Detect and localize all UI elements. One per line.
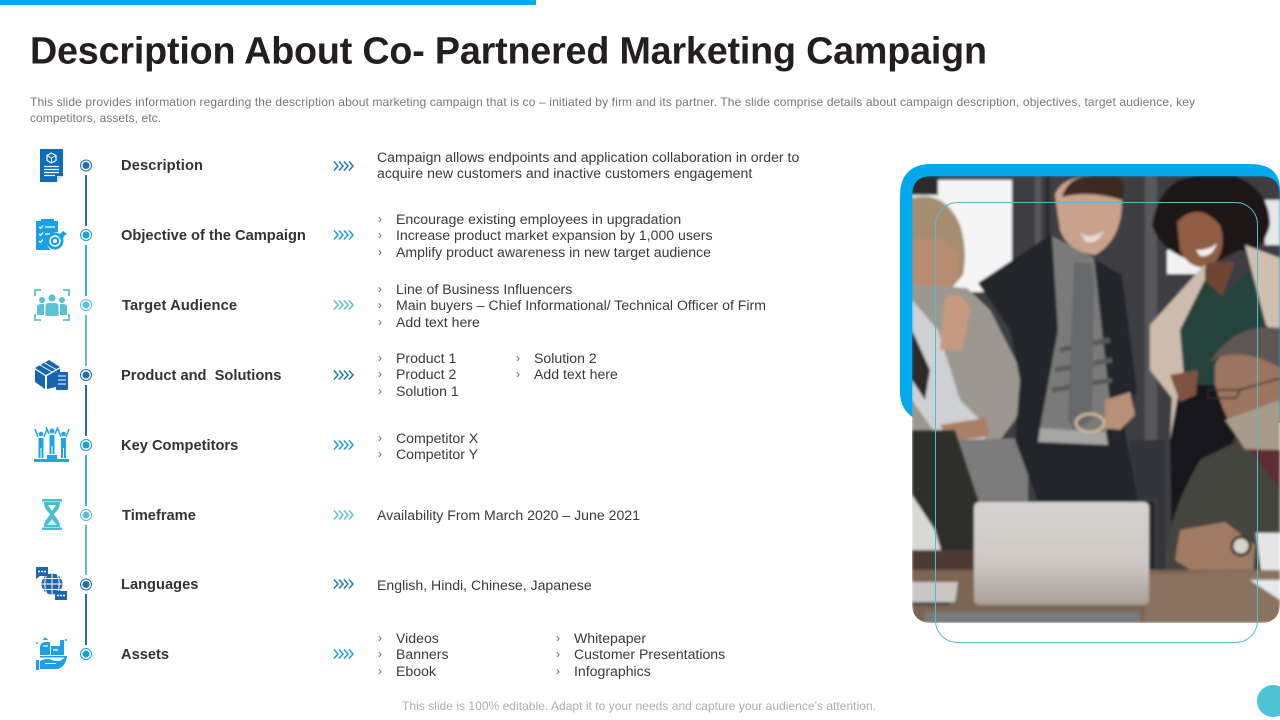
table bbox=[912, 570, 1280, 623]
arrow bbox=[334, 300, 353, 310]
row: languages bbox=[36, 567, 592, 600]
footer note: This slide is 100% editable. Adapt it to your needs and capture your audience's attention. bbox=[402, 699, 876, 713]
right woman bbox=[1152, 176, 1270, 260]
bullet list: › bbox=[378, 631, 382, 645]
photo outline frame bbox=[936, 202, 1258, 642]
bullet list bbox=[378, 630, 725, 679]
arrow bbox=[334, 370, 353, 380]
photo: business team around a laptop bbox=[912, 176, 1280, 623]
arrow bbox=[334, 440, 353, 450]
corner circle bbox=[1257, 685, 1280, 717]
bullet list: › bbox=[378, 431, 382, 445]
icon: clipboard with target bbox=[36, 219, 67, 250]
label: Target Audience bbox=[122, 298, 237, 314]
bullet list: › bbox=[556, 647, 560, 661]
bullet list: › bbox=[378, 228, 382, 242]
bullet list bbox=[378, 281, 766, 330]
row: target audience bbox=[35, 281, 766, 330]
bullet list: Videos bbox=[396, 630, 439, 646]
bullet list: › bbox=[556, 664, 560, 678]
bullet list: › bbox=[378, 664, 382, 678]
bullet list: Main buyers – Chief Informational/ Technical Officer of Firm bbox=[396, 297, 766, 313]
bullet list: Competitor Y bbox=[396, 446, 479, 462]
bullet list: › bbox=[556, 631, 560, 645]
row: timeframe bbox=[42, 499, 640, 530]
bullet list: Line of Business Influencers bbox=[396, 281, 572, 297]
icon: globe with chat bubbles bbox=[36, 567, 67, 600]
bullet list: Product 1 bbox=[396, 350, 456, 366]
row: key competitors bbox=[34, 427, 479, 462]
arrow bbox=[334, 230, 353, 240]
bullet list: › bbox=[516, 367, 520, 381]
bullet list: › bbox=[378, 298, 382, 312]
laptop bbox=[974, 502, 1149, 605]
icon: audience in brackets bbox=[35, 290, 69, 320]
icon: three raised-arm figures bbox=[34, 427, 69, 462]
bullet list: › bbox=[378, 212, 382, 226]
bullet list: › bbox=[378, 647, 382, 661]
label: Assets bbox=[121, 647, 169, 663]
bullet list: › bbox=[378, 447, 382, 461]
bullet list: Ebook bbox=[396, 663, 437, 679]
timeline bbox=[80, 160, 92, 660]
bullet list: Product 2 bbox=[396, 366, 456, 382]
title: Description About Co- Partnered Marketing Campaign bbox=[30, 30, 987, 72]
bullet list: Add text here bbox=[534, 366, 618, 382]
label: Key Competitors bbox=[121, 438, 238, 454]
label: Languages bbox=[121, 577, 198, 593]
intro text: competitors, assets, etc. bbox=[30, 111, 161, 125]
arrow bbox=[334, 650, 353, 658]
intro text: This slide provides information regarding the description about marketing campaign that is co – initiated by firm and its partner. The slide comprise details about campaign description, objectives, target audience, key bbox=[30, 95, 1195, 109]
bullet list: › bbox=[378, 315, 382, 329]
bullet list: Increase product market expansion by 1,000 users bbox=[396, 227, 713, 243]
bullet list: Competitor X bbox=[396, 430, 479, 446]
bullet list: Whitepaper bbox=[574, 630, 646, 646]
bullet list: Add text here bbox=[396, 314, 480, 330]
row: objective bbox=[36, 211, 713, 260]
centre man bbox=[978, 235, 1138, 502]
icon: hourglass bbox=[42, 499, 62, 530]
text: Availability From March 2020 – June 2021 bbox=[377, 507, 640, 523]
bullet list bbox=[378, 350, 618, 399]
top accent bar bbox=[0, 0, 536, 5]
bullet list: Infographics bbox=[574, 663, 651, 679]
text block: acquire new customers and inactive customers engagement bbox=[377, 165, 752, 181]
row: product and solutions bbox=[35, 350, 618, 399]
right man bbox=[1170, 443, 1254, 562]
bullet list: › bbox=[378, 367, 382, 381]
intro text bbox=[30, 95, 1195, 125]
label: Timeframe bbox=[122, 508, 196, 524]
bullet list: › bbox=[516, 351, 520, 365]
bullet list: › bbox=[378, 282, 382, 296]
left woman bbox=[912, 197, 965, 290]
text block: Campaign allows endpoints and application collaboration in order to bbox=[377, 149, 799, 165]
icon: hand holding assets bbox=[36, 637, 67, 670]
bullet list: Encourage existing employees in upgradation bbox=[396, 211, 681, 227]
bullet list: › bbox=[378, 245, 382, 259]
bullet list bbox=[378, 430, 479, 462]
bullet list: › bbox=[378, 351, 382, 365]
arrow bbox=[334, 162, 353, 170]
label: Product and Solutions bbox=[121, 368, 281, 384]
label: Description bbox=[121, 158, 203, 174]
bullet list: Solution 1 bbox=[396, 383, 459, 399]
icon: document with cube bbox=[40, 149, 63, 182]
bullet list bbox=[378, 211, 713, 260]
bullet list: › bbox=[378, 384, 382, 398]
bullet list: Banners bbox=[396, 646, 448, 662]
icon: box with checklist bbox=[35, 360, 68, 390]
bullet list: Amplify product awareness in new target audience bbox=[396, 244, 711, 260]
bullet list: Customer Presentations bbox=[574, 646, 725, 662]
label: Objective of the Campaign bbox=[121, 228, 306, 244]
arrow bbox=[334, 510, 353, 520]
arrow bbox=[334, 580, 353, 588]
text: English, Hindi, Chinese, Japanese bbox=[377, 577, 592, 593]
bullet list: Solution 2 bbox=[534, 350, 597, 366]
row: assets bbox=[36, 630, 725, 679]
row: description bbox=[40, 149, 799, 182]
text block bbox=[377, 149, 799, 181]
blue backing shape bbox=[900, 164, 1280, 423]
